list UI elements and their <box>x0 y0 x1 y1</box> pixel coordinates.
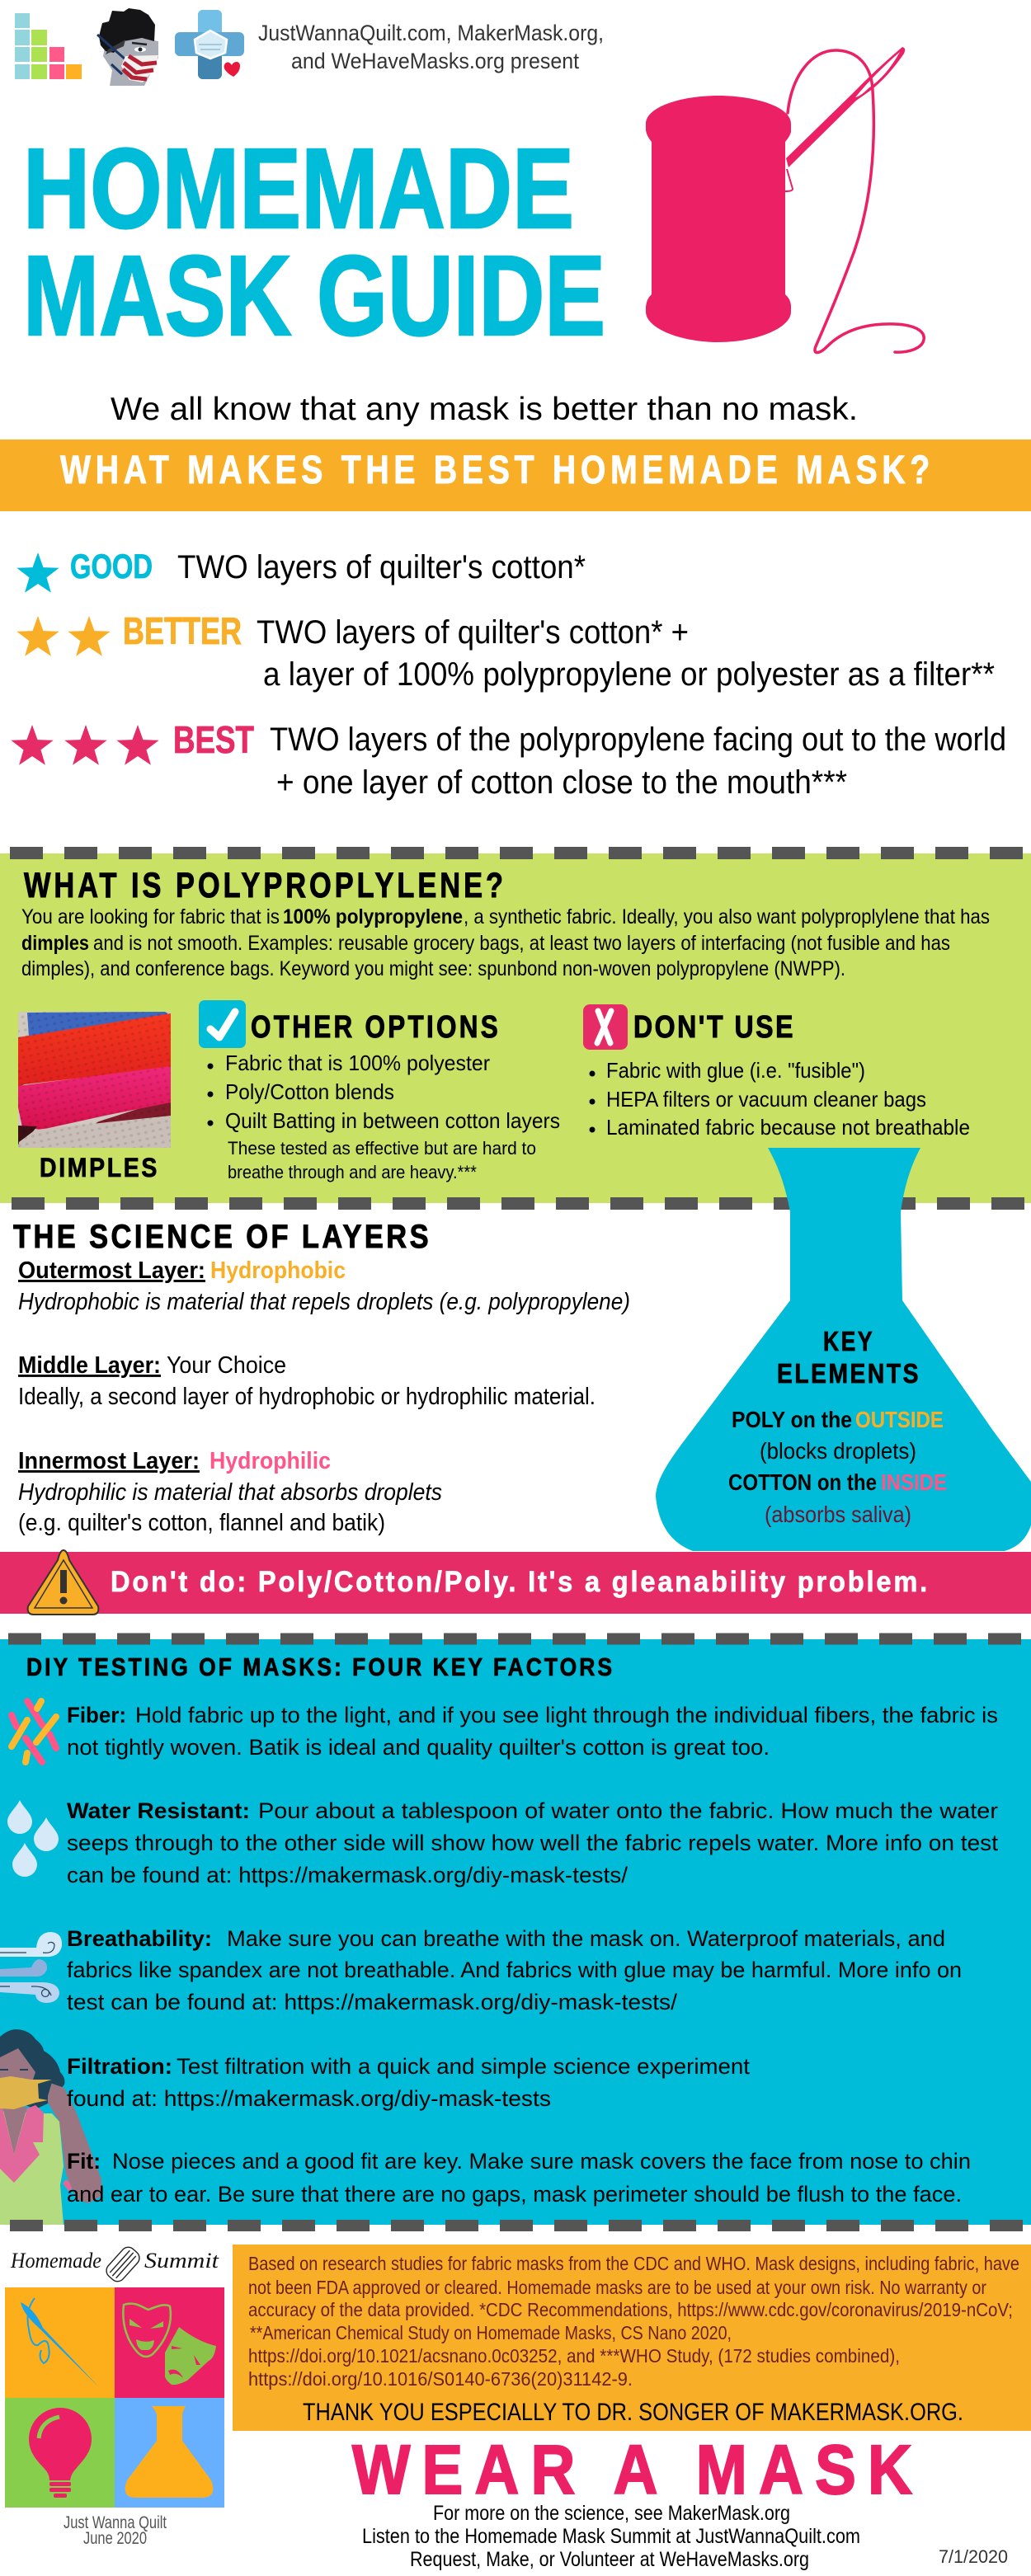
factor: breathability: fabrics like spandex are not breathable. And fabrics with glue may be harmful. More info on <box>67 1958 962 1982</box>
icon: wind gusts <box>0 1932 62 2003</box>
icon: star <box>16 552 59 593</box>
innermost layer: (e.g. quilter's cotton, flannel and batik) <box>18 1510 385 1536</box>
factor: fit: Nose pieces and a good fit are key. Make sure mask covers the face from nose to chin <box>112 2149 971 2174</box>
icon: woven fibers <box>12 1701 56 1762</box>
heading: WHAT IS POLYPROPLYLENE? <box>24 866 506 905</box>
innermost layer <box>18 1448 442 1536</box>
middle layer: Ideally, a second layer of hydrophobic or hydrophilic material. <box>18 1384 596 1410</box>
other options: OTHER OPTIONS <box>251 1010 501 1045</box>
title: MASK GUIDE <box>23 233 605 360</box>
factor: fiber: not tightly woven. Batik is ideal and quality quilter's cotton is great too. <box>67 1735 770 1760</box>
footer links: Listen to the Homemade Mask Summit at JustWannaQuilt.com <box>362 2525 860 2548</box>
tile: theatre masks <box>115 2287 224 2398</box>
don't use: HEPA filters or vacuum cleaner bags <box>606 1087 926 1112</box>
factor: filtration: Test filtration with a quick and simple science experiment <box>177 2054 751 2079</box>
text block: definition: dimples <box>21 932 89 955</box>
presenter text <box>258 21 604 73</box>
don't use: DON'T USE <box>633 1010 795 1045</box>
outermost layer: Hydrophobic <box>210 1257 346 1284</box>
factor: filtration: Filtration: <box>67 2054 172 2079</box>
rating: best: + one layer of cotton close to the mouth*** <box>276 764 847 801</box>
flask: key elements: POLY on the <box>732 1407 852 1432</box>
presenter text: JustWannaQuilt.com, MakerMask.org, <box>258 21 604 45</box>
warning band: Don't do: Poly/Cotton/Poly. It's a gleanability problem. <box>111 1566 930 1598</box>
rating: better: BETTER <box>123 609 242 652</box>
panel: references <box>233 2245 1031 2431</box>
middle layer <box>18 1352 596 1410</box>
logo: homemade summit <box>10 2245 219 2284</box>
other options: Poly/Cotton blends <box>225 1079 394 1104</box>
logo: homemade summit: Homemade <box>10 2249 101 2273</box>
rating: good <box>16 547 586 593</box>
icon: check box <box>199 1000 246 1048</box>
icon: water drops <box>7 1800 59 1877</box>
tile: needle <box>5 2287 115 2398</box>
factor: fiber: Fiber: <box>67 1703 126 1728</box>
logo: homemade summit: Summit <box>144 2249 219 2273</box>
text block: definition: dimples), and conference bags. Keyword you might see: spunbond non-woven polypropylene (NWPP). <box>21 957 845 980</box>
factor: fiber: Hold fabric up to the light, and if you see light through the individual fibers, the fabric is <box>135 1703 998 1728</box>
innermost layer: Hydrophilic <box>209 1448 331 1474</box>
factor: breathability: Make sure you can breathe with the mask on. Waterproof materials, and <box>227 1926 945 1951</box>
innermost layer: Innermost Layer: <box>18 1448 200 1474</box>
date: 7/1/2020 <box>939 2546 1008 2567</box>
tagline: We all know that any mask is better than no mask. <box>111 392 858 427</box>
title <box>23 125 605 360</box>
presenter text: and WeHaveMasks.org present <box>291 49 579 73</box>
rating: best <box>11 718 1006 801</box>
flask: key elements: COTTON on the <box>728 1469 877 1495</box>
panel: science of layers <box>13 1219 630 1536</box>
factor: water resistant: Pour about a tablespoon of water onto the fabric. How much the water <box>258 1798 998 1823</box>
flask: key elements: INSIDE <box>881 1469 947 1495</box>
panel: what is polypropylene <box>0 853 1031 1204</box>
don't use: Laminated fabric because not breathable <box>606 1115 970 1140</box>
factor: fiber <box>67 1703 998 1760</box>
middle layer: Your Choice <box>167 1352 286 1379</box>
footer links <box>362 2502 860 2571</box>
rating: better <box>16 609 995 693</box>
photo: dimpled fabric <box>18 1012 171 1148</box>
outermost layer: Hydrophobic is material that repels droplets (e.g. polypropylene) <box>18 1289 630 1315</box>
icon: woman wearing mask <box>0 2029 101 2225</box>
factor: water resistant <box>67 1798 999 1887</box>
heading: DIY TESTING OF MASKS: FOUR KEY FACTORS <box>26 1652 614 1681</box>
footer links: For more on the science, see MakerMask.org <box>433 2502 790 2525</box>
text block: definition <box>21 905 990 980</box>
icon: three stars <box>11 725 159 765</box>
outermost layer: Outermost Layer: <box>18 1257 205 1284</box>
flask: key elements <box>656 1148 1031 1551</box>
factor: water resistant: can be found at: https://makermask.org/diy-mask-tests/ <box>67 1863 628 1887</box>
rating: good: GOOD <box>70 547 153 585</box>
banner: what makes the best homemade mask <box>0 440 1031 511</box>
rating: good: TWO layers of quilter's cotton* <box>177 549 586 585</box>
call to action: wear a mask: WEAR A MASK <box>352 2431 924 2508</box>
factor: breathability: Breathability: <box>67 1926 212 1951</box>
flask: key elements: KEY <box>823 1326 874 1356</box>
other options: Quilt Batting in between cotton layers <box>225 1108 560 1133</box>
flask: key elements: ELEMENTS <box>777 1358 920 1389</box>
factor: fit: Fit: <box>67 2149 101 2174</box>
label: dimples: DIMPLES <box>40 1153 159 1182</box>
title: HOMEMADE <box>23 125 574 252</box>
flask: key elements: (absorbs saliva) <box>765 1502 911 1527</box>
warning band <box>0 1550 1031 1615</box>
flask: key elements: (blocks droplets) <box>760 1438 916 1464</box>
icon: portrait with flag mask <box>97 8 158 86</box>
icon: warning triangle <box>28 1550 98 1615</box>
other options: Fabric that is 100% polyester <box>225 1051 490 1075</box>
flask: key elements: OUTSIDE <box>855 1407 944 1432</box>
panel: references: **American Chemical Study on Homemade Masks, CS Nano 2020, <box>250 2322 732 2343</box>
factor: fit: and ear to ear. Be sure that there are no gaps, mask perimeter should be flush to the face. <box>67 2182 962 2207</box>
rating: better: TWO layers of quilter's cotton* + <box>257 614 689 651</box>
icon: medical cross with mask <box>175 10 244 79</box>
factor: water resistant: seeps through to the other side will show how well the fabric repels water. More info on test <box>67 1831 999 1855</box>
factor: filtration <box>67 2054 751 2111</box>
factor: water resistant: Water Resistant: <box>67 1798 250 1823</box>
text block: definition: and is not smooth. Examples: reusable grocery bags, at least two layers of interfacing (not fusible and has <box>93 932 950 955</box>
don't use <box>583 1004 970 1140</box>
factor: fit <box>67 2149 971 2207</box>
icon: spool of thread with needle <box>646 47 924 353</box>
don't use: Fabric with glue (i.e. "fusible") <box>606 1058 865 1083</box>
heading: THE SCIENCE OF LAYERS <box>13 1219 431 1255</box>
other options: breathe through and are heavy.*** <box>228 1162 477 1182</box>
footer links: Request, Make, or Volunteer at WeHaveMasks.org <box>410 2548 809 2571</box>
factor: breathability: test can be found at: https://makermask.org/diy-mask-tests/ <box>67 1990 678 2014</box>
outermost layer <box>18 1257 630 1315</box>
icon: mask sketch <box>103 2245 143 2284</box>
icon: x box <box>583 1004 628 1050</box>
other options <box>199 1000 560 1182</box>
icon: two stars <box>16 616 111 656</box>
caption: June 2020 <box>83 2529 147 2548</box>
text block: definition: You are looking for fabric that is <box>21 905 280 928</box>
icon: heart <box>224 62 240 77</box>
panel: references: https://doi.org/10.1016/S0140-6736(20)31142-9. <box>248 2368 633 2390</box>
panel: references: https://doi.org/10.1021/acsnano.0c03252, and ***WHO Study, (172 studies combined), <box>248 2345 900 2367</box>
caption: Just Wanna Quilt <box>64 2513 167 2532</box>
panel: DIY testing <box>0 1639 1031 2226</box>
innermost layer: Hydrophilic is material that absorbs droplets <box>18 1479 442 1506</box>
middle layer: Middle Layer: <box>18 1352 161 1379</box>
logo grid: four tiles <box>5 2287 224 2508</box>
text block: definition: 100% polypropylene <box>283 905 463 928</box>
tile: flask <box>115 2398 224 2508</box>
icon: quilt logo <box>15 13 82 79</box>
rating: best: BEST <box>173 718 254 761</box>
tile: light bulb <box>5 2398 115 2508</box>
factor: breathability <box>67 1926 962 2014</box>
caption <box>64 2513 167 2548</box>
other options: These tested as effective but are hard to <box>228 1138 536 1159</box>
factor: filtration: found at: https://makermask.org/diy-mask-tests <box>67 2086 551 2111</box>
